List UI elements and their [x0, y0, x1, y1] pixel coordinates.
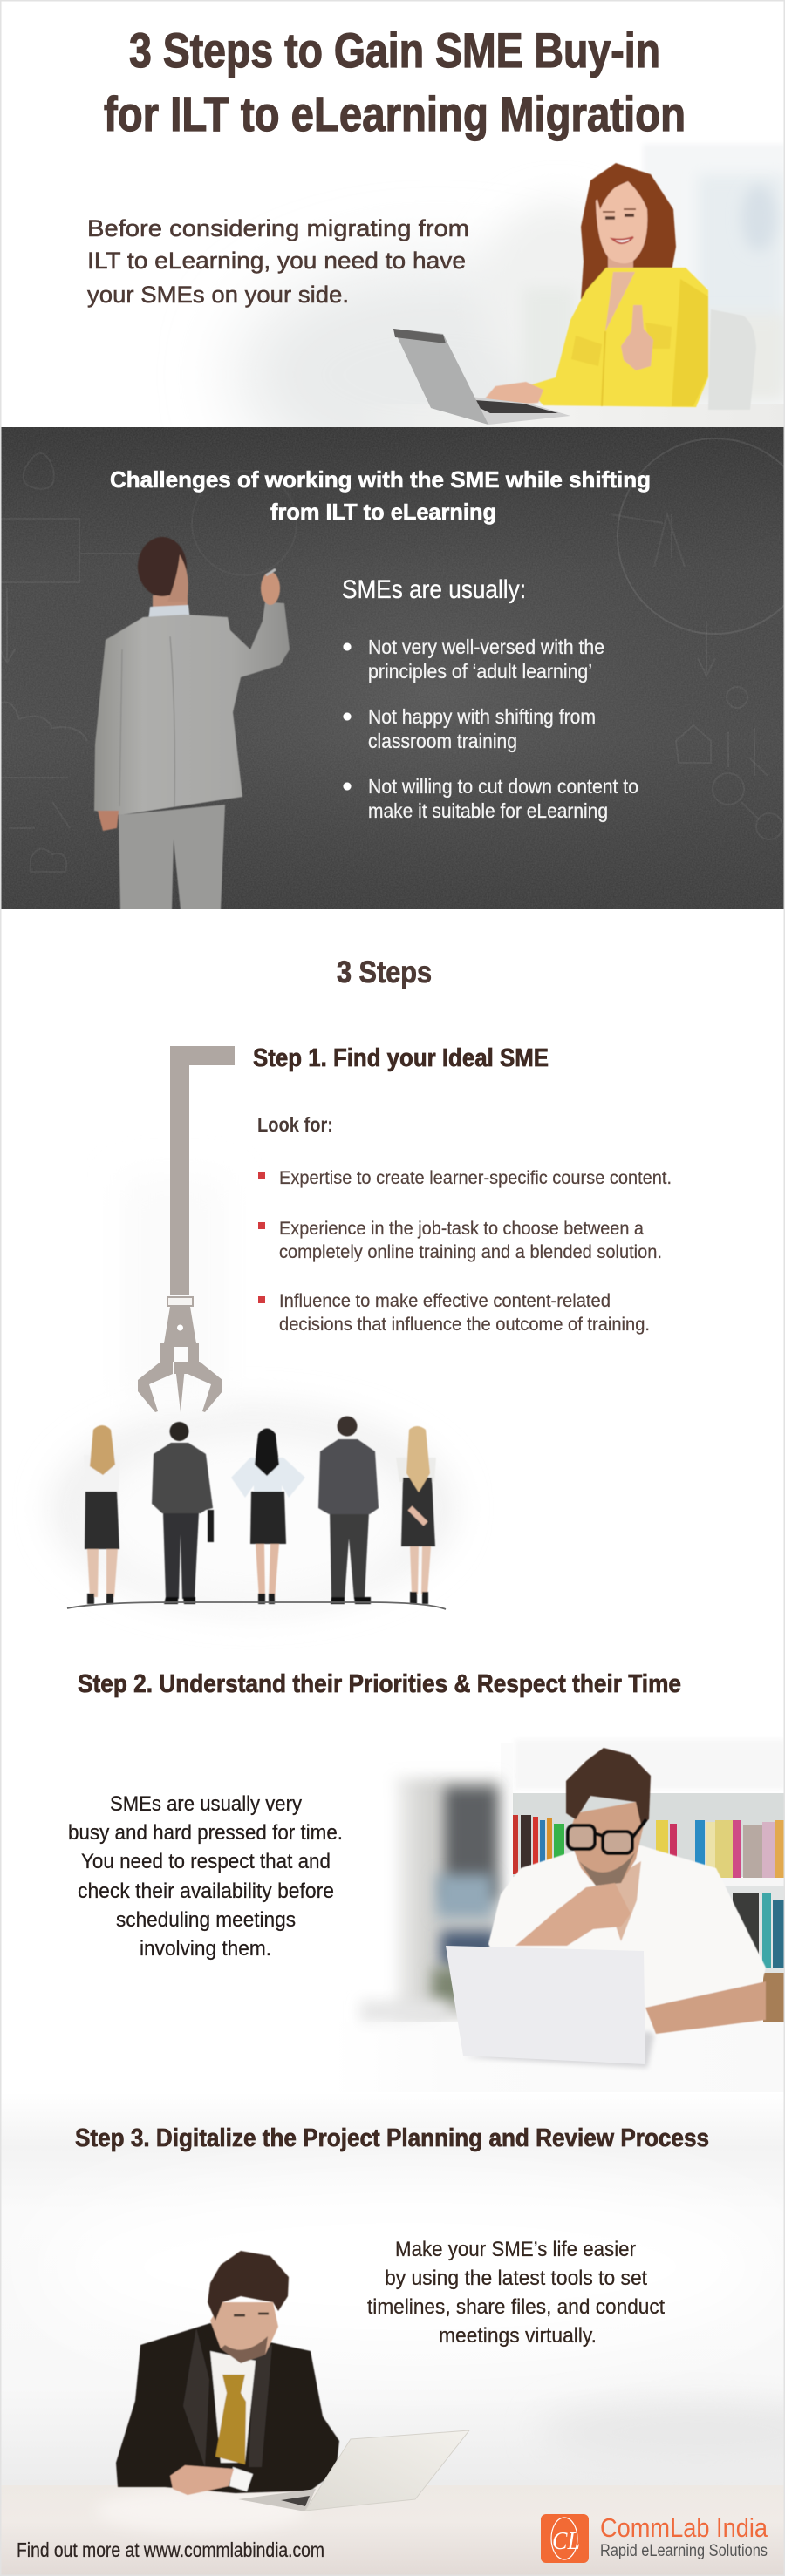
item 3: decisions that influence the outcome of training.: [279, 1315, 650, 1335]
title: for ILT to eLearning Migration: [104, 86, 686, 141]
panel: step 1 people backdrop: [52, 1177, 454, 1608]
step 1 heading: Step 1. Find your Ideal SME: [253, 1044, 549, 1072]
bullet 3: make it suitable for eLearning: [368, 799, 608, 822]
bullet 1: [344, 636, 604, 683]
heading: 3 steps: 3 Steps: [337, 955, 432, 989]
illustration: man at bookshelf: [358, 1747, 783, 2071]
illustration: businessman at desk: [116, 2251, 339, 2495]
chalk sketches: [0, 438, 785, 872]
item 2: completely online training and a blended solution.: [279, 1242, 662, 1262]
step 3 text: [367, 2238, 665, 2348]
step 2 heading: Step 2. Understand their Priorities & Respect their Time: [78, 1670, 681, 1698]
person: woman 3: [396, 1426, 436, 1604]
challenges bullet list: [344, 636, 638, 822]
step 1 look for: Look for:: [257, 1113, 333, 1136]
hero desk: [506, 404, 783, 427]
step 2 text: You need to respect that and: [81, 1850, 331, 1873]
intro text: your SMEs on your side.: [87, 282, 349, 308]
floor line: [67, 1602, 446, 1609]
item 2: [258, 1219, 662, 1262]
person: woman 1: [84, 1425, 120, 1604]
item 3: Influence to make effective content-related: [279, 1291, 611, 1311]
illustration: five candidates: [84, 1416, 436, 1604]
intro text: [87, 215, 469, 308]
man: [488, 1748, 766, 2034]
logo mark: CL: [552, 2527, 580, 2555]
challenges heading: [110, 466, 651, 525]
bullet 2: Not happy with shifting from: [368, 705, 596, 728]
item 2: Experience in the job-task to choose between a: [279, 1219, 644, 1239]
panel: hero: [234, 146, 783, 427]
step 2 text: SMEs are usually very: [110, 1792, 302, 1816]
icon: chair: [708, 309, 756, 410]
person: man 2: [318, 1416, 379, 1604]
step 2 text: check their availability before: [78, 1879, 334, 1903]
intro text: Before considering migrating from: [87, 215, 469, 241]
illustration: businessman writing on board: [94, 537, 290, 910]
title: [104, 23, 686, 141]
person: man 1: [152, 1422, 214, 1604]
challenges subheading: SMEs are usually:: [342, 575, 526, 604]
bullet 1: principles of ‘adult learning’: [368, 660, 592, 683]
step 3 heading: Step 3. Digitalize the Project Planning and Review Process: [75, 2124, 709, 2152]
books: [513, 1815, 783, 1968]
laptop: [446, 1946, 654, 2068]
person: woman 2: [231, 1428, 305, 1604]
logo mark: [541, 2514, 589, 2563]
bullet 1: Not very well-versed with the: [368, 636, 604, 658]
bullet 3: Not willing to cut down content to: [368, 775, 638, 798]
challenges heading: Challenges of working with the SME while shifting: [110, 466, 651, 493]
icon: robotic claw: [138, 1046, 235, 1412]
step 3 text: Make your SME’s life easier: [395, 2238, 636, 2261]
step 2 text: busy and hard pressed for time.: [68, 1821, 343, 1845]
shelf backdrop: [358, 1771, 783, 2022]
panel: step 3 background: [0, 2092, 785, 2576]
bullet 2: classroom training: [368, 730, 517, 752]
panel: challenges chalkboard: [0, 427, 785, 910]
step 2 text: involving them.: [140, 1937, 271, 1961]
step 1 checklist: [258, 1168, 672, 1335]
step 3 text: meetings virtually.: [439, 2324, 597, 2348]
desk: [405, 2022, 458, 2026]
icon: laptop open: [238, 2430, 469, 2511]
step 2 text: [68, 1792, 343, 1961]
hero blurred office backdrop: [234, 146, 783, 427]
item 3: [258, 1291, 650, 1335]
icon: laptop: [393, 329, 570, 425]
item 1: Expertise to create learner-specific course content.: [279, 1168, 672, 1188]
bullet 2: [344, 705, 596, 752]
step 2 text: scheduling meetings: [116, 1908, 296, 1932]
illustration: woman with thumbs up: [481, 163, 708, 407]
step 3 text: timelines, share files, and conduct: [367, 2295, 665, 2319]
logo: CommLab India: [541, 2512, 768, 2563]
footer link text: Find out more at www.commlabindia.com: [17, 2539, 324, 2561]
title: 3 Steps to Gain SME Buy-in: [129, 23, 660, 78]
challenges heading: from ILT to eLearning: [270, 499, 496, 525]
intro text: ILT to eLearning, you need to have: [87, 248, 466, 274]
step 3 text: by using the latest tools to set: [385, 2267, 647, 2290]
bullet 3: [344, 775, 638, 822]
